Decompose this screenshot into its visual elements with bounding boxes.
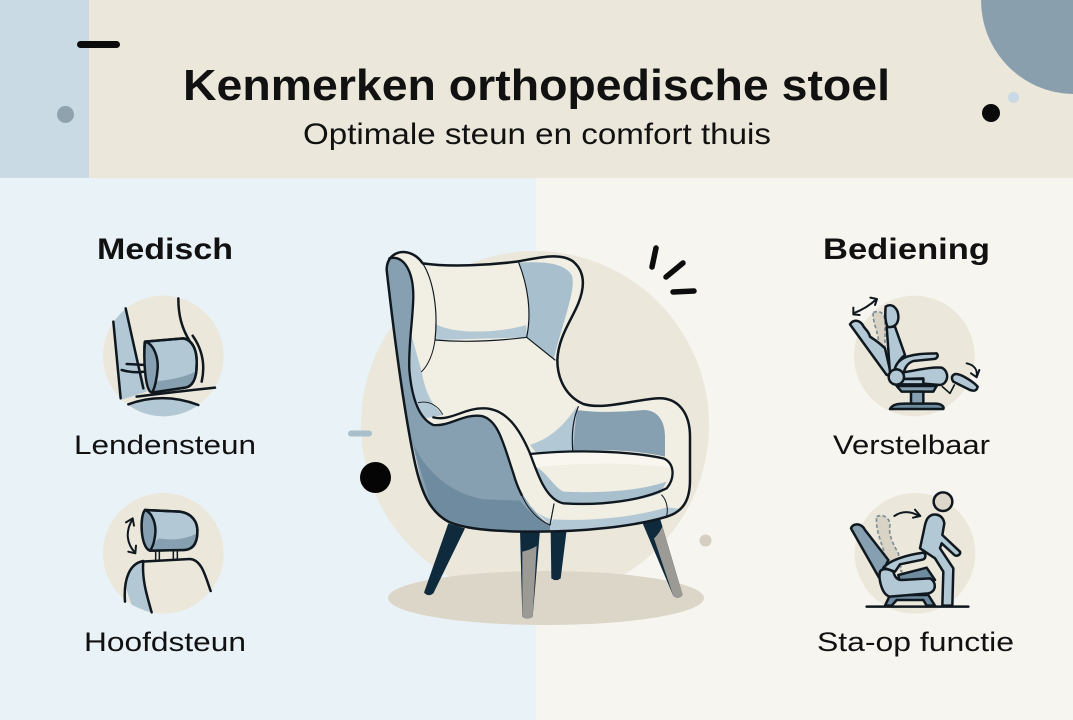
backrest arrow	[853, 298, 877, 315]
armchair illustration	[387, 252, 690, 619]
armrest	[895, 353, 938, 373]
accent: motion lines	[652, 248, 694, 292]
header pale dot	[1008, 92, 1019, 103]
icon: adjustable recliner	[850, 296, 979, 416]
accent: grey dash	[348, 430, 372, 436]
back lower shade	[530, 407, 577, 453]
dark seat	[898, 568, 935, 582]
headrest right blue panel	[518, 262, 573, 358]
background: right panel	[536, 178, 1073, 720]
header dash	[77, 41, 120, 48]
header grey dot	[57, 106, 74, 123]
reclined backrest	[850, 321, 891, 375]
accent: black dot	[360, 462, 391, 493]
chair base	[885, 595, 935, 606]
icon: headrest	[103, 493, 224, 614]
left side dark shade	[412, 440, 550, 535]
left side body	[387, 258, 550, 535]
label: Hoofdsteun: Hoofdsteun	[84, 627, 246, 657]
right arm inner panel	[573, 410, 665, 457]
header left strip	[0, 0, 89, 178]
seat cushion	[530, 451, 672, 504]
footrest	[942, 385, 954, 393]
seat front band shade	[550, 508, 679, 530]
heading: Bediening: Bediening	[823, 233, 990, 266]
floor shadow	[388, 571, 704, 625]
chair legs	[424, 518, 683, 619]
floor line	[867, 603, 968, 610]
ghost position of backrest	[873, 312, 885, 350]
backdrop circle behind chair	[361, 251, 709, 599]
heading: Medisch: Medisch	[97, 233, 233, 266]
chair back	[851, 524, 888, 578]
upright back and headrest	[887, 327, 905, 373]
accent: tan dot	[700, 534, 712, 546]
subtitle: Optimale steun en comfort thuis	[303, 118, 771, 151]
title: Kenmerken orthopedische stoel	[183, 61, 890, 110]
motion arrow	[894, 510, 920, 518]
chair shell	[387, 252, 690, 532]
pedestal	[897, 386, 937, 392]
label: Lendensteun: Lendensteun	[74, 430, 256, 460]
seat cushion	[880, 569, 935, 597]
header black dot	[982, 104, 1000, 122]
label: Verstelbaar: Verstelbaar	[833, 430, 990, 460]
header band	[0, 0, 1073, 178]
seat	[903, 367, 947, 385]
person head	[934, 492, 952, 511]
inner back light shade	[410, 336, 444, 418]
icon: lumbar support	[103, 296, 224, 425]
ghost outline	[876, 516, 902, 572]
armrest	[883, 553, 925, 572]
label: Sta-op functie: Sta-op functie	[817, 627, 1014, 657]
headrest underside shade	[435, 323, 527, 340]
background: left panel	[0, 178, 536, 720]
chair outlines	[387, 252, 690, 532]
icon: stand-up function	[851, 492, 975, 614]
header corner circle	[981, 0, 1073, 94]
person body	[920, 515, 960, 606]
